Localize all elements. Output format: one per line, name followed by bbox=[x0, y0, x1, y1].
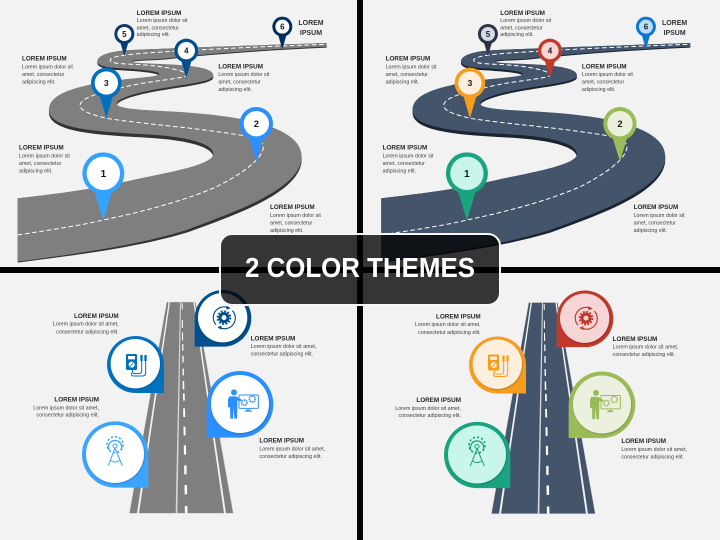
text: step 3: adipiscing elit. bbox=[386, 80, 419, 86]
text: step 5: adipiscing elit. bbox=[500, 32, 534, 38]
text: step 1: LOREM IPSUM bbox=[383, 145, 427, 152]
pin 3: 3 bbox=[104, 78, 109, 88]
pin 1: 1 bbox=[464, 169, 470, 180]
pin 2 bbox=[603, 107, 637, 162]
pin 1 bbox=[446, 152, 488, 221]
pin 3: 3 bbox=[468, 78, 473, 88]
pin 2 bbox=[240, 107, 273, 162]
panel: gray winding road bbox=[0, 0, 357, 267]
text: top left: LOREM IPSUM bbox=[436, 313, 481, 320]
badge: multimeter bbox=[107, 336, 164, 393]
pin 6 bbox=[636, 17, 656, 49]
text: step 4: adipiscing elit. bbox=[582, 87, 615, 93]
text: step 6: IPSUM bbox=[664, 30, 686, 37]
pin 1 bbox=[82, 152, 124, 221]
badge: tower bbox=[82, 421, 148, 488]
icon: person and monitor bbox=[590, 390, 620, 419]
text: step 1: LOREM IPSUM bbox=[19, 145, 64, 152]
pin 5 bbox=[478, 24, 498, 56]
text: step 5: LOREM IPSUM bbox=[500, 10, 545, 17]
straight road navy bbox=[491, 302, 595, 514]
pin 5: 5 bbox=[486, 30, 491, 39]
text: step 5: Lorem ipsum dolor sit bbox=[500, 18, 552, 24]
text: top left: consectetur adipiscing elit. bbox=[418, 330, 481, 336]
text: lower left: consectetur adipiscing elit. bbox=[36, 413, 99, 419]
text: lower right: consectetur adipiscing elit. bbox=[259, 454, 322, 460]
text: step 5: Lorem ipsum dolor sit bbox=[137, 18, 188, 24]
text: step 4: Lorem ipsum dolor sit bbox=[582, 72, 633, 78]
text: step 5: LOREM IPSUM bbox=[137, 10, 181, 17]
text: step 6: IPSUM bbox=[300, 30, 322, 37]
text: step 5: adipiscing elit. bbox=[137, 32, 170, 38]
text: top left: consectetur adipiscing elit. bbox=[56, 329, 119, 335]
pin 6: 6 bbox=[280, 23, 285, 32]
text: step 1: Lorem ipsum dolor sit bbox=[383, 153, 434, 159]
pin 2: 2 bbox=[254, 119, 259, 129]
pin 4: 4 bbox=[184, 47, 189, 56]
pin 3 bbox=[91, 68, 122, 118]
text: top left: Lorem ipsum dolor sit amet, bbox=[415, 322, 481, 328]
text: top right: consectetur adipiscing elit. bbox=[251, 352, 313, 358]
text: step 2: LOREM IPSUM bbox=[270, 204, 315, 211]
text: step 5: amet, consectetur bbox=[137, 25, 179, 31]
panel: multicolor winding road bbox=[363, 0, 720, 267]
title banner bbox=[220, 234, 500, 305]
icon: compass tower bbox=[107, 437, 123, 466]
text: step 2: adipiscing elit. bbox=[634, 228, 667, 234]
badge: engineer with monitor bbox=[569, 371, 635, 438]
text: step 2: Lorem ipsum dolor sit bbox=[634, 213, 685, 219]
winding road gray bbox=[18, 43, 327, 263]
badge: tower bbox=[444, 422, 510, 488]
pin 2: 2 bbox=[617, 119, 623, 129]
badge: gear cycle bbox=[195, 290, 251, 347]
text: top left: Lorem ipsum dolor sit amet, bbox=[53, 322, 119, 328]
text: step 6: LOREM bbox=[298, 20, 324, 27]
panel: gray straight road bbox=[0, 273, 357, 540]
text: step 1: amet, consectetur bbox=[383, 161, 425, 167]
badge: gear cycle bbox=[557, 291, 613, 347]
text: step 2: Lorem ipsum dolor sit bbox=[270, 213, 321, 219]
pin 5 bbox=[114, 24, 134, 56]
winding road navy bbox=[381, 43, 690, 263]
text: step 2: amet, consectetur bbox=[634, 221, 676, 227]
text: step 1: Lorem ipsum dolor sit bbox=[19, 153, 70, 159]
pin 1: 1 bbox=[100, 169, 106, 180]
pin 4 bbox=[174, 39, 198, 78]
text: step 3: adipiscing elit. bbox=[22, 80, 55, 86]
pin 3 bbox=[455, 68, 485, 118]
text: step 1: adipiscing elit. bbox=[383, 169, 416, 175]
text: lower left: Lorem ipsum dolor sit amet, bbox=[33, 405, 99, 411]
text: step 2: adipiscing elit. bbox=[270, 228, 303, 234]
straight road gray bbox=[129, 302, 233, 513]
text: step 6: LOREM bbox=[662, 20, 687, 27]
pin 6: 6 bbox=[644, 23, 649, 32]
icon: compass tower bbox=[469, 437, 485, 466]
text: lower right: LOREM IPSUM bbox=[259, 437, 304, 444]
icon: person and monitor bbox=[228, 389, 258, 419]
text: step 4: LOREM IPSUM bbox=[218, 63, 263, 70]
text: top right: Lorem ipsum dolor sit amet, bbox=[251, 344, 316, 350]
text: step 2: amet, consectetur bbox=[270, 221, 313, 227]
text: top right: consectetur adipiscing elit. bbox=[613, 352, 675, 358]
pin 6 bbox=[272, 17, 292, 49]
text: lower left: LOREM IPSUM bbox=[416, 397, 461, 404]
text: step 3: Lorem ipsum dolor sit bbox=[386, 64, 437, 70]
text: lower right: LOREM IPSUM bbox=[621, 438, 666, 445]
pin 5: 5 bbox=[122, 30, 127, 39]
text: top right: LOREM IPSUM bbox=[613, 336, 657, 343]
text: lower right: Lorem ipsum dolor sit amet, bbox=[621, 447, 687, 453]
text: step 3: LOREM IPSUM bbox=[386, 56, 430, 63]
text: lower right: Lorem ipsum dolor sit amet, bbox=[259, 446, 325, 452]
panel: multicolor straight road bbox=[363, 273, 720, 540]
text: top left: LOREM IPSUM bbox=[74, 313, 119, 320]
text: step 2: LOREM IPSUM bbox=[634, 204, 678, 211]
text: top right: LOREM IPSUM bbox=[251, 335, 295, 342]
text: step 3: LOREM IPSUM bbox=[22, 56, 67, 63]
text: step 4: amet, consectetur bbox=[218, 80, 261, 86]
text: lower right: consectetur adipiscing elit. bbox=[621, 454, 684, 460]
text: step 3: amet, consectetur bbox=[386, 72, 428, 78]
icon: gear with arrows bbox=[213, 306, 235, 330]
text: step 3: amet, consectetur bbox=[22, 72, 65, 78]
text: step 4: adipiscing elit. bbox=[218, 87, 252, 93]
icon: gear with arrows bbox=[575, 306, 597, 330]
text: step 4: Lorem ipsum dolor sit bbox=[218, 72, 270, 78]
text: step 5: amet, consectetur bbox=[500, 25, 543, 31]
pin 4: 4 bbox=[548, 47, 553, 56]
title: 2 COLOR THEMES bbox=[245, 252, 475, 283]
text: lower left: LOREM IPSUM bbox=[54, 397, 99, 404]
icon: multimeter bbox=[488, 354, 509, 376]
badge: multimeter bbox=[469, 336, 526, 393]
text: lower left: Lorem ipsum dolor sit amet, bbox=[395, 406, 461, 412]
icon: multimeter bbox=[126, 354, 147, 376]
text: step 1: amet, consectetur bbox=[19, 161, 62, 167]
text: lower left: consectetur adipiscing elit. bbox=[398, 413, 461, 419]
text: step 1: adipiscing elit. bbox=[19, 169, 52, 175]
text: step 4: amet, consectetur bbox=[582, 80, 625, 86]
text: step 4: LOREM IPSUM bbox=[582, 63, 627, 70]
text: step 3: Lorem ipsum dolor sit bbox=[22, 64, 73, 70]
badge: engineer with monitor bbox=[207, 371, 273, 438]
text: top right: Lorem ipsum dolor sit amet, bbox=[613, 344, 678, 350]
pin 4 bbox=[538, 39, 562, 78]
